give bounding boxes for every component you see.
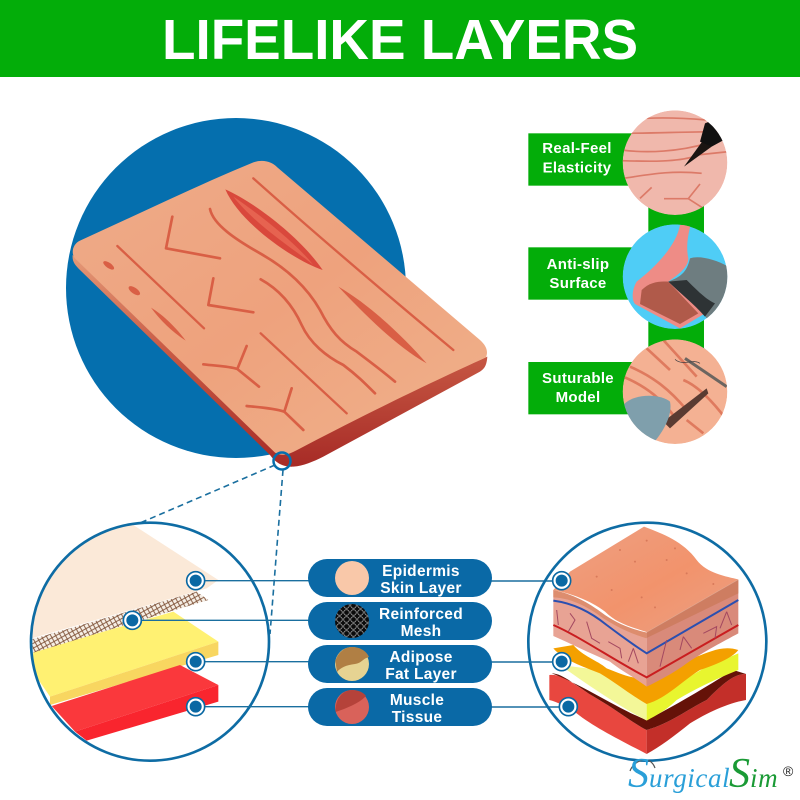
fat layer xyxy=(32,612,218,705)
pill: epidermis: Skin Layer xyxy=(380,580,462,597)
marker: muscle xyxy=(187,698,205,716)
pad top surface xyxy=(73,161,487,455)
skin block xyxy=(553,527,738,687)
reinforced mesh xyxy=(32,592,208,653)
label text: Real-Feel Elasticity: Elasticity xyxy=(543,160,612,176)
label box: Real-Feel Elasticity xyxy=(528,133,635,186)
logo: SurgicalSim: Sim xyxy=(729,751,778,797)
pill: epidermis: Epidermis xyxy=(382,563,460,580)
photo: suturing with forceps xyxy=(622,339,728,444)
right circle: skin cross-section xyxy=(528,523,766,761)
blue circle behind pad xyxy=(66,118,406,458)
big open wound xyxy=(225,189,323,270)
legend pills xyxy=(308,559,492,726)
right connector lines xyxy=(490,581,566,707)
label text: Anti-slip Surface: Surface xyxy=(549,275,607,292)
pill: epidermis xyxy=(308,559,492,597)
tapered incisions xyxy=(338,287,427,363)
pill: fat: Fat Layer xyxy=(385,666,457,683)
marker: skin xyxy=(553,572,571,590)
label text: Suturable Model: Suturable xyxy=(542,370,614,387)
muscle layer xyxy=(52,665,218,741)
incisions xyxy=(117,178,453,430)
connector lines xyxy=(132,581,310,707)
pill: mesh xyxy=(308,602,492,640)
feature column xyxy=(528,110,733,447)
pad side edge xyxy=(73,255,487,467)
pill: muscle xyxy=(308,688,492,726)
label text: Suturable Model: Model xyxy=(556,389,600,406)
muscle block xyxy=(549,670,746,754)
photo: scalpel on skin xyxy=(620,110,730,215)
zoom marker on pad corner xyxy=(274,452,290,470)
logo: SurgicalSim: ® xyxy=(783,763,794,779)
label text: Anti-slip Surface xyxy=(547,256,609,292)
suture pad product xyxy=(73,161,487,467)
label text: Real-Feel Elasticity xyxy=(542,140,612,176)
marker: fat xyxy=(553,653,571,671)
pill: mesh: Reinforced xyxy=(379,606,463,623)
marker: fat xyxy=(187,653,205,671)
label box: Suturable Model xyxy=(528,362,635,414)
logo: SurgicalSim xyxy=(628,751,794,797)
dashed zoom lines xyxy=(140,465,283,634)
pill: muscle: Tissue xyxy=(392,709,442,726)
pill: fat: Adipose xyxy=(389,649,453,666)
pill: mesh: Mesh xyxy=(401,623,441,640)
label box: Anti-slip Surface xyxy=(528,247,635,300)
photo: flexible pad and glove xyxy=(623,224,728,329)
marker: mesh xyxy=(123,611,141,629)
circle outline xyxy=(528,523,766,761)
epidermis layer xyxy=(32,525,218,638)
fat block xyxy=(553,645,738,721)
header banner xyxy=(0,0,800,77)
circle outline xyxy=(31,523,269,761)
marker: muscle xyxy=(559,698,577,716)
pill: fat xyxy=(308,645,492,683)
label text: Suturable Model xyxy=(542,370,614,406)
label text: Real-Feel Elasticity: Real-Feel xyxy=(542,140,612,157)
left circle: layers close-up xyxy=(20,520,310,761)
logo: SurgicalSim: Surgical xyxy=(628,751,730,797)
title: LIFELIKE LAYERS xyxy=(162,8,638,72)
marker: epidermis xyxy=(187,572,205,590)
green vertical connector xyxy=(648,200,704,350)
pill: muscle: Muscle xyxy=(390,692,444,709)
label text: Anti-slip Surface: Anti-slip xyxy=(547,256,609,273)
